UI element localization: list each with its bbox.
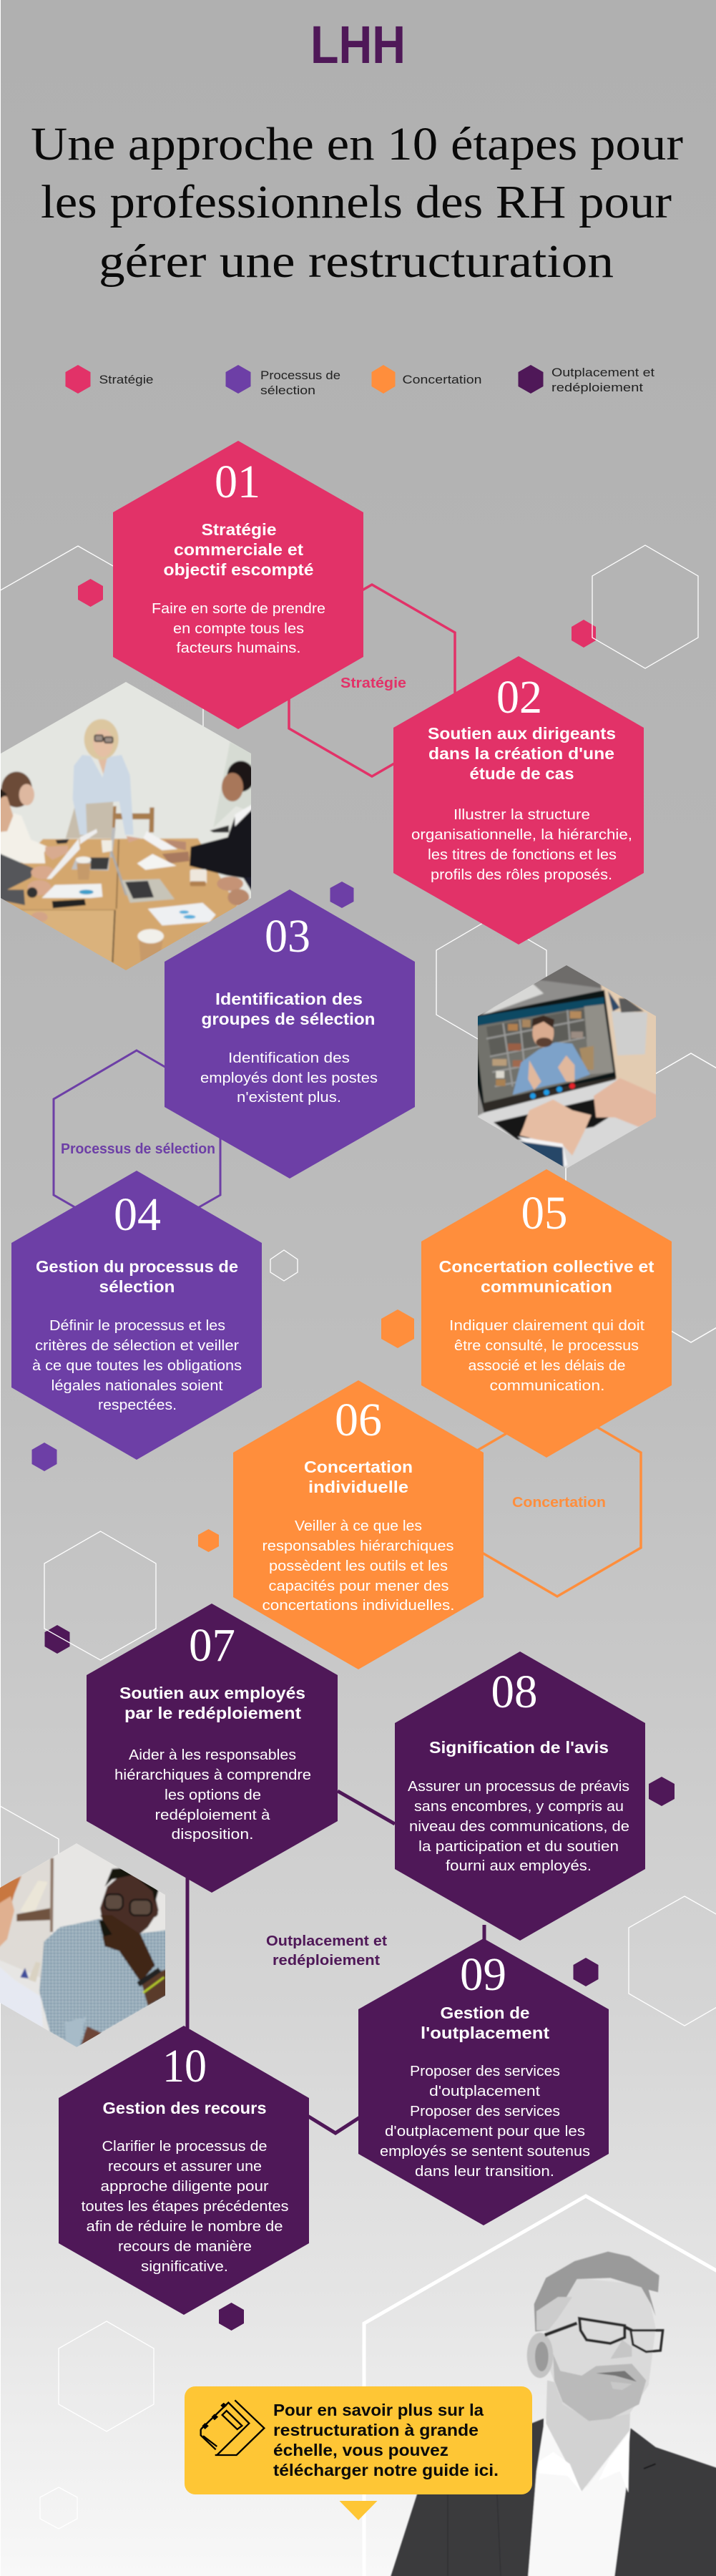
callout text	[273, 2401, 499, 2479]
legend item: Concertation: Concertation	[402, 373, 482, 386]
label: Concertation: Concertation	[512, 1495, 606, 1511]
heading: dans la création d'une	[428, 744, 614, 763]
body text: les titres de fonctions et les	[428, 847, 617, 863]
body text: recours de manière	[118, 2239, 252, 2255]
body text: afin de réduire le nombre de	[86, 2219, 283, 2235]
body text: fourni aux employés.	[446, 1858, 592, 1874]
callout text: Pour en savoir plus sur la	[273, 2401, 484, 2419]
legend item: Stratégie: Stratégie	[99, 373, 153, 386]
body text: légales nationales soient	[52, 1378, 223, 1394]
step 08: Signification de l'avis	[395, 1652, 645, 1941]
body text: être consulté, le processus	[454, 1338, 639, 1354]
body text: en compte tous les	[173, 621, 304, 637]
body text: Proposer des services	[410, 2064, 560, 2079]
body text: les options de	[165, 1787, 261, 1803]
legend item: Concertation	[372, 365, 482, 394]
number: 03	[265, 910, 310, 962]
connector lines between steps 07 to 10	[187, 1791, 484, 2133]
body text: Veiller à ce que les	[295, 1518, 422, 1534]
label: Processus de sélection: Processus de sélection	[61, 1141, 215, 1157]
heading: par le redéploiement	[124, 1704, 301, 1722]
body text	[262, 1518, 455, 1614]
body text	[408, 1779, 629, 1874]
body text: d'outplacement pour que les	[385, 2124, 585, 2140]
step 05: Concertation collective	[421, 1169, 672, 1458]
heading: Soutien aux employés	[119, 1684, 305, 1702]
body text: employés dont les postes	[200, 1070, 378, 1086]
legend item: Outplacement et redéploiement	[518, 365, 654, 394]
heading: commerciale et	[174, 540, 303, 559]
body text: disposition.	[172, 1827, 253, 1843]
portrait: man in suit	[386, 2252, 716, 2576]
logo: LHH: LHH	[310, 15, 406, 74]
body text: Clarifier le processus de	[102, 2139, 268, 2155]
title	[31, 118, 683, 288]
number: 02	[496, 671, 542, 723]
heading: Gestion des recours	[103, 2099, 266, 2117]
body text: critères de sélection et veiller	[35, 1338, 239, 1354]
heading	[439, 1257, 654, 1296]
body text: approche diligente pour	[100, 2179, 269, 2195]
body text: sans encombres, y compris au	[414, 1799, 624, 1815]
small accent hexagons	[31, 579, 675, 2331]
step 02: Soutien aux dirigeants	[393, 656, 644, 945]
callout text: échelle, vous pouvez	[273, 2441, 448, 2459]
hexagon	[393, 656, 644, 945]
large white hexagon outline behind portrait	[364, 2196, 716, 2576]
heading	[421, 2004, 549, 2042]
hexagon	[421, 1169, 672, 1458]
body text: Assurer un processus de préavis	[408, 1779, 629, 1795]
step 07: Soutien aux employés	[87, 1604, 338, 1893]
title: les professionnels des RH pour	[41, 176, 672, 228]
outline hexagon: Stratégie	[289, 585, 455, 776]
body text: capacités pour mener des	[269, 1579, 449, 1594]
body text: Aider à les responsables	[129, 1747, 296, 1763]
step 03: Identification des groupes	[165, 889, 415, 1179]
hexagon	[165, 889, 415, 1179]
body text: n'existent plus.	[237, 1090, 341, 1106]
step 04: Gestion du processus	[11, 1171, 262, 1460]
heading: Soutien aux dirigeants	[428, 724, 616, 743]
body text: Faire en sorte de prendre	[152, 601, 325, 617]
heading: groupes de sélection	[202, 1010, 375, 1028]
legend item: Outplacement et redéploiement: Outplacement et	[551, 366, 654, 379]
hexagon	[395, 1652, 645, 1941]
outline hexagon: Processus de sélection	[54, 1050, 220, 1243]
label: Outplacement et redéploiement: Outplacement et	[266, 1933, 387, 1949]
body text: Proposer des services	[410, 2104, 560, 2119]
hexagon	[87, 1604, 338, 1893]
number: 05	[521, 1187, 568, 1239]
body text: possèdent les outils et les	[269, 1558, 448, 1574]
heading	[304, 1458, 413, 1496]
number: 08	[491, 1666, 538, 1718]
heading: Gestion de	[441, 2004, 529, 2022]
hexagon	[59, 2026, 309, 2315]
body text: hiérarchiques à comprendre	[114, 1767, 311, 1783]
heading	[119, 1684, 305, 1722]
hexagon	[233, 1380, 484, 1669]
legend item: Outplacement et redéploiement: redéploiement	[551, 381, 643, 394]
hexagon	[358, 1938, 609, 2225]
body text: à ce que toutes les obligations	[32, 1358, 242, 1374]
body text	[152, 601, 325, 656]
body text: organisationnelle, la hiérarchie,	[411, 827, 632, 843]
heading	[163, 520, 313, 579]
body text	[32, 1318, 242, 1413]
callout: download the guide	[185, 2386, 532, 2494]
arrow: pointing down	[339, 2501, 378, 2520]
number: 01	[215, 456, 260, 508]
outline hexagon: Concertation	[474, 1404, 641, 1596]
heading: communication	[481, 1277, 612, 1296]
title: Une approche en 10 étapes pour	[31, 118, 683, 170]
label: Stratégie: Stratégie	[340, 675, 406, 691]
heading: Identification des	[215, 990, 363, 1008]
body text	[82, 2139, 289, 2275]
label: Outplacement et redéploiement: redéploiement	[273, 1953, 380, 1968]
number: 06	[335, 1394, 382, 1446]
photo: thoughtful man	[0, 1843, 165, 2047]
heading: Concertation collective et	[439, 1257, 654, 1276]
body text	[200, 1050, 378, 1106]
legend item: Stratégie	[66, 365, 153, 394]
body text: associé et les délais de	[468, 1358, 625, 1374]
hexagon	[11, 1171, 262, 1460]
body text: niveau des communications, de	[409, 1819, 629, 1835]
body text: concertations individuelles.	[262, 1598, 455, 1614]
heading	[428, 724, 616, 783]
step 06: Concertation individuelle	[233, 1380, 484, 1669]
body text: toutes les étapes précédentes	[82, 2199, 289, 2215]
heading: objectif escompté	[163, 560, 313, 579]
number: 04	[114, 1189, 161, 1241]
photo: video call on a laptop	[478, 965, 656, 1169]
body text: Définir le processus et les	[49, 1318, 225, 1334]
body text	[449, 1318, 644, 1394]
heading: individuelle	[308, 1478, 408, 1496]
heading: sélection	[99, 1277, 175, 1296]
legend	[66, 365, 654, 397]
callout text: restructuration à grande	[273, 2421, 479, 2439]
photo: meeting around a table	[0, 675, 263, 978]
icon: book	[201, 2400, 264, 2455]
body text: redéploiement à	[155, 1807, 270, 1823]
body text: d'outplacement	[429, 2084, 540, 2099]
heading: l'outplacement	[421, 2024, 549, 2042]
body text: employés se sentent soutenus	[380, 2144, 590, 2160]
step 10: Gestion des recours	[59, 2026, 309, 2315]
body text	[411, 807, 632, 883]
body text: la participation et du soutien	[418, 1839, 619, 1855]
step 09: Gestion de l'outplacement	[358, 1938, 609, 2225]
heading: Gestion du processus de	[36, 1257, 238, 1276]
legend item: Processus de sélection	[226, 365, 340, 397]
heading: étude de cas	[469, 764, 574, 783]
step 01: Stratégie commerciale	[113, 441, 363, 729]
legend item: Processus de sélection: sélection	[260, 384, 315, 397]
body text: responsables hiérarchiques	[262, 1538, 453, 1554]
body text: Identification des	[228, 1050, 350, 1066]
label: Outplacement et redéploiement	[266, 1933, 387, 1968]
body text: respectées.	[98, 1397, 177, 1413]
number: 09	[460, 1948, 506, 2001]
body text: facteurs humains.	[176, 640, 300, 656]
body text: recours et assurer une	[108, 2159, 262, 2175]
body text: communication.	[489, 1378, 605, 1394]
heading: Stratégie	[202, 520, 276, 539]
body text	[380, 2064, 590, 2180]
body text: Indiquer clairement qui doit	[449, 1318, 644, 1334]
title: gérer une restructuration	[99, 235, 614, 288]
callout text: télécharger notre guide ici.	[273, 2461, 499, 2479]
body text: profils des rôles proposés.	[431, 867, 612, 883]
number: 10	[162, 2040, 207, 2092]
heading: Concertation	[304, 1458, 413, 1476]
number: 07	[189, 1619, 235, 1672]
body text	[114, 1747, 311, 1843]
body text: dans leur transition.	[415, 2164, 554, 2180]
hexagon	[113, 441, 363, 729]
body text: Illustrer la structure	[453, 807, 590, 823]
legend item: Processus de sélection: Processus de	[260, 369, 340, 382]
heading	[202, 990, 375, 1028]
heading: Signification de l'avis	[429, 1738, 609, 1757]
body text: significative.	[141, 2259, 228, 2275]
heading	[36, 1257, 238, 1296]
